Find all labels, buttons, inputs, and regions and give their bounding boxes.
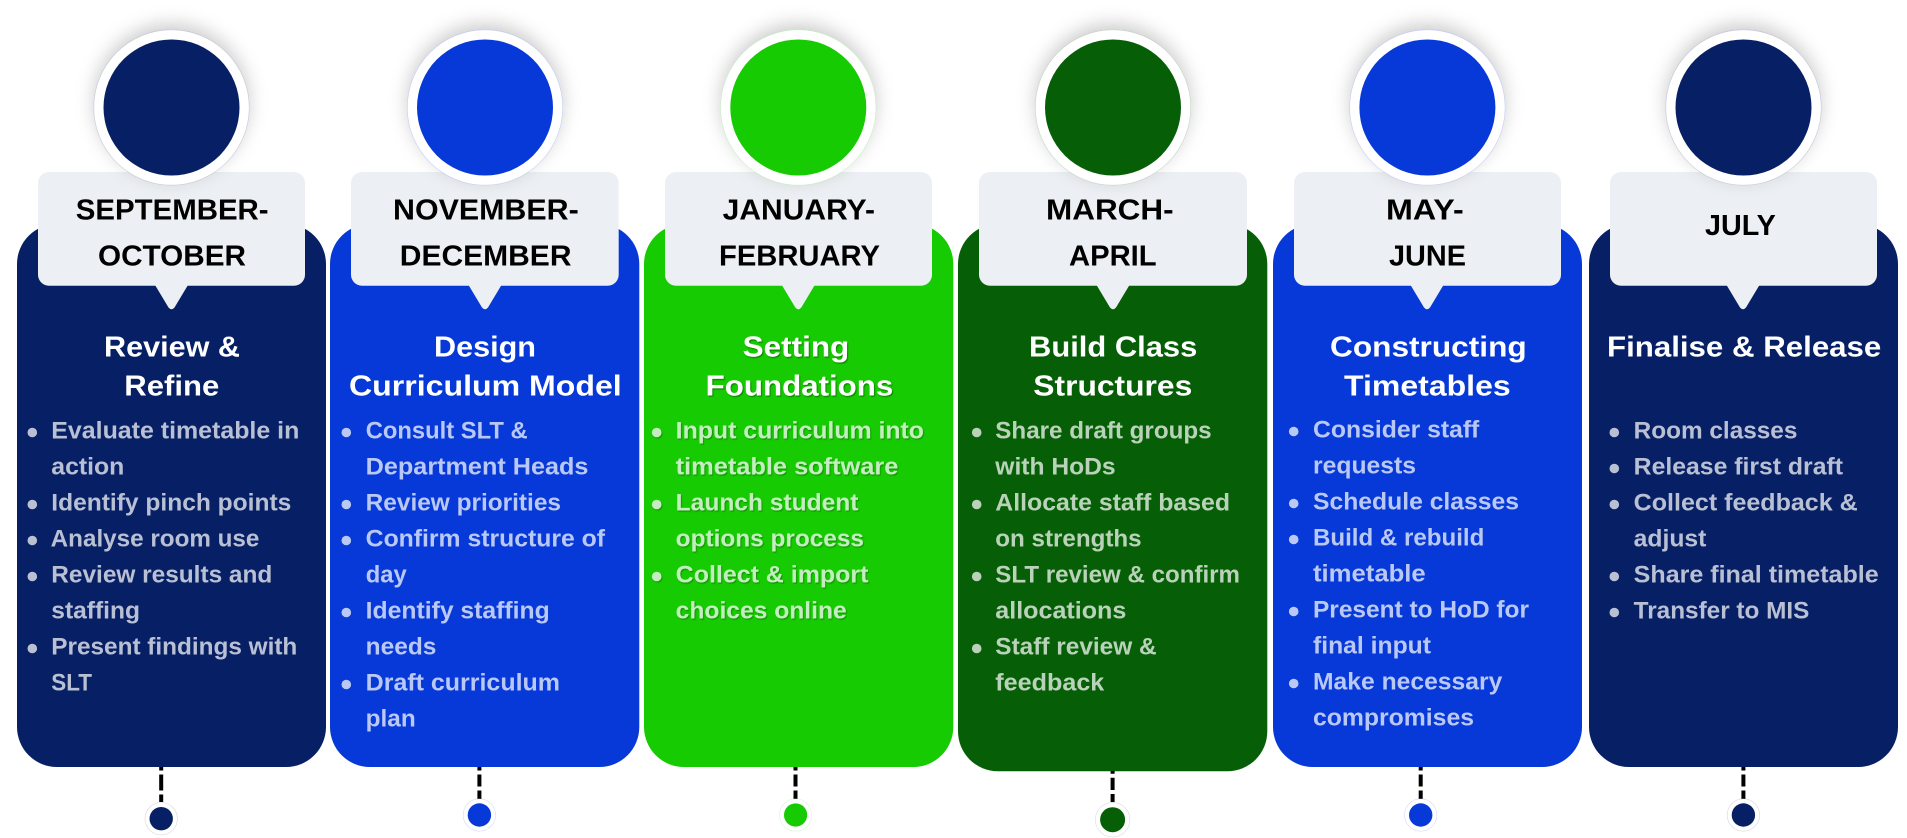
- panel: March-April: [958, 30, 1267, 837]
- month label: [76, 194, 269, 272]
- bullet list: Department Heads: [366, 454, 588, 480]
- bullet list: Schedule classes: [1313, 488, 1519, 516]
- callout: month label background: [1610, 172, 1877, 309]
- bullet list: Input curriculum into: [676, 418, 924, 444]
- bullet list: staffing: [51, 598, 140, 624]
- timeline dot: [1095, 802, 1130, 837]
- bullet list: adjust: [1634, 526, 1706, 552]
- timeline connector: [477, 767, 481, 799]
- bullet list: [342, 418, 606, 732]
- heading: Build Class: [1029, 332, 1197, 364]
- bullet list: Confirm structure of: [366, 526, 606, 552]
- heading: [706, 332, 893, 403]
- bullet list: requests: [1313, 452, 1416, 480]
- bullet list: Identify pinch points: [51, 490, 291, 516]
- bullet list: Consider staff: [1313, 416, 1480, 444]
- card background: [1589, 224, 1898, 767]
- card background: [958, 224, 1267, 771]
- heading: Setting: [743, 332, 849, 364]
- bullet list: plan: [366, 706, 416, 732]
- timeline dot: [145, 802, 177, 835]
- bullet list: Release first draft: [1634, 454, 1843, 480]
- month label: APRIL: [1069, 240, 1157, 272]
- bullet list: SLT: [51, 670, 92, 696]
- bullet list: Review priorities: [366, 490, 561, 516]
- panel: September-October: [17, 30, 326, 835]
- bullet list: Review results and: [51, 562, 272, 588]
- bullet list: day: [366, 562, 407, 588]
- bullet list: Consult SLT &: [366, 418, 528, 444]
- bullet list: [652, 418, 924, 624]
- month label: [1386, 194, 1466, 272]
- timeline dot: [463, 799, 496, 831]
- month label: JANUARY-: [723, 194, 875, 226]
- icon circle: [94, 30, 249, 185]
- bullet list: action: [51, 454, 124, 480]
- month label: DECEMBER: [400, 240, 572, 272]
- month label: [719, 194, 880, 272]
- callout: month label background: [665, 172, 932, 309]
- card background: [1273, 224, 1582, 767]
- bullet list: feedback: [995, 670, 1105, 696]
- heading: Timetables: [1344, 371, 1511, 403]
- bullet list: Analyse room use: [51, 526, 259, 552]
- panel: November-December: [330, 30, 639, 831]
- bullet list: [28, 418, 299, 696]
- timeline connector: [1419, 767, 1423, 799]
- timeline connector: [1111, 771, 1115, 802]
- bullet list: Room classes: [1634, 418, 1797, 444]
- card background: [330, 224, 639, 767]
- bullet list: Allocate staff based: [995, 490, 1230, 516]
- bullet list: Transfer to MIS: [1634, 598, 1809, 624]
- bullet list: Identify staffing: [366, 598, 550, 624]
- bullet list: Evaluate timetable in: [51, 418, 299, 444]
- bullet list: [1289, 416, 1529, 732]
- heading: Finalise & Release: [1607, 332, 1881, 364]
- timeline connector: [1741, 767, 1745, 799]
- heading: Refine: [124, 371, 219, 403]
- panel: July: [1589, 30, 1898, 831]
- bullet list: timetable: [1313, 560, 1426, 588]
- bullet list: Build & rebuild: [1313, 524, 1484, 552]
- bullet list: options process: [676, 526, 864, 552]
- bullet list: final input: [1313, 632, 1431, 660]
- bullet list: Staff review &: [995, 634, 1157, 660]
- panel: January-February: [644, 30, 953, 831]
- bullet list: SLT review & confirm: [995, 562, 1240, 588]
- bullet list: Present findings with: [51, 634, 297, 660]
- icon circle: [407, 30, 563, 185]
- bullet list: Launch student: [676, 490, 858, 516]
- timeline dot: [1727, 799, 1760, 831]
- bullet list: Share draft groups: [995, 418, 1212, 444]
- bullet list: on strengths: [995, 526, 1142, 552]
- heading: Foundations: [706, 371, 893, 403]
- callout: month label background: [979, 172, 1247, 309]
- callout: month label background: [351, 172, 619, 309]
- bullet list: choices online: [676, 598, 847, 624]
- timeline connector: [794, 767, 798, 799]
- month label: SEPTEMBER-: [76, 194, 269, 226]
- bullet list: timetable software: [676, 454, 898, 480]
- timeline dot: [1404, 799, 1437, 831]
- heading: [349, 332, 622, 403]
- month label: OCTOBER: [98, 240, 246, 272]
- bullet list: Collect feedback &: [1634, 490, 1858, 516]
- bullet list: needs: [366, 634, 436, 660]
- bullet list: Share final timetable: [1634, 562, 1879, 588]
- callout: month label background: [38, 172, 305, 309]
- bullet list: [972, 418, 1240, 696]
- card background: [17, 224, 326, 767]
- timeline dot: [779, 799, 812, 831]
- heading: Curriculum Model: [349, 371, 622, 403]
- month label: FEBRUARY: [719, 240, 880, 272]
- callout: month label background: [1294, 172, 1561, 309]
- card background: [644, 224, 953, 767]
- heading: Constructing: [1330, 332, 1527, 364]
- month label: [1046, 194, 1174, 272]
- timeline connector: [159, 767, 163, 802]
- heading: Structures: [1033, 371, 1192, 403]
- icon circle: [1350, 30, 1505, 185]
- month label: JULY: [1705, 210, 1776, 242]
- heading: [1029, 332, 1197, 403]
- heading: Review &: [104, 332, 240, 364]
- bullet list: allocations: [995, 598, 1126, 624]
- bullet list: Collect & import: [676, 562, 868, 588]
- bullet list: with HoDs: [994, 454, 1116, 480]
- month label: JUNE: [1389, 240, 1466, 272]
- icon circle: [721, 30, 876, 185]
- heading: [104, 332, 240, 403]
- month label: NOVEMBER-: [393, 194, 579, 226]
- icon circle: [1666, 30, 1821, 185]
- bullet list: Draft curriculum: [366, 670, 560, 696]
- bullet list: [1610, 418, 1879, 624]
- icon circle: [1035, 30, 1191, 185]
- month label: MAY-: [1386, 194, 1464, 226]
- bullet list: compromises: [1313, 704, 1474, 732]
- month label: MARCH-: [1046, 194, 1174, 226]
- bullet list: Present to HoD for: [1313, 596, 1529, 624]
- bullet list: Make necessary: [1313, 668, 1503, 696]
- heading: Design: [434, 332, 536, 364]
- panel: May-June: [1273, 30, 1582, 831]
- heading: [1330, 332, 1527, 403]
- month label: [393, 194, 579, 272]
